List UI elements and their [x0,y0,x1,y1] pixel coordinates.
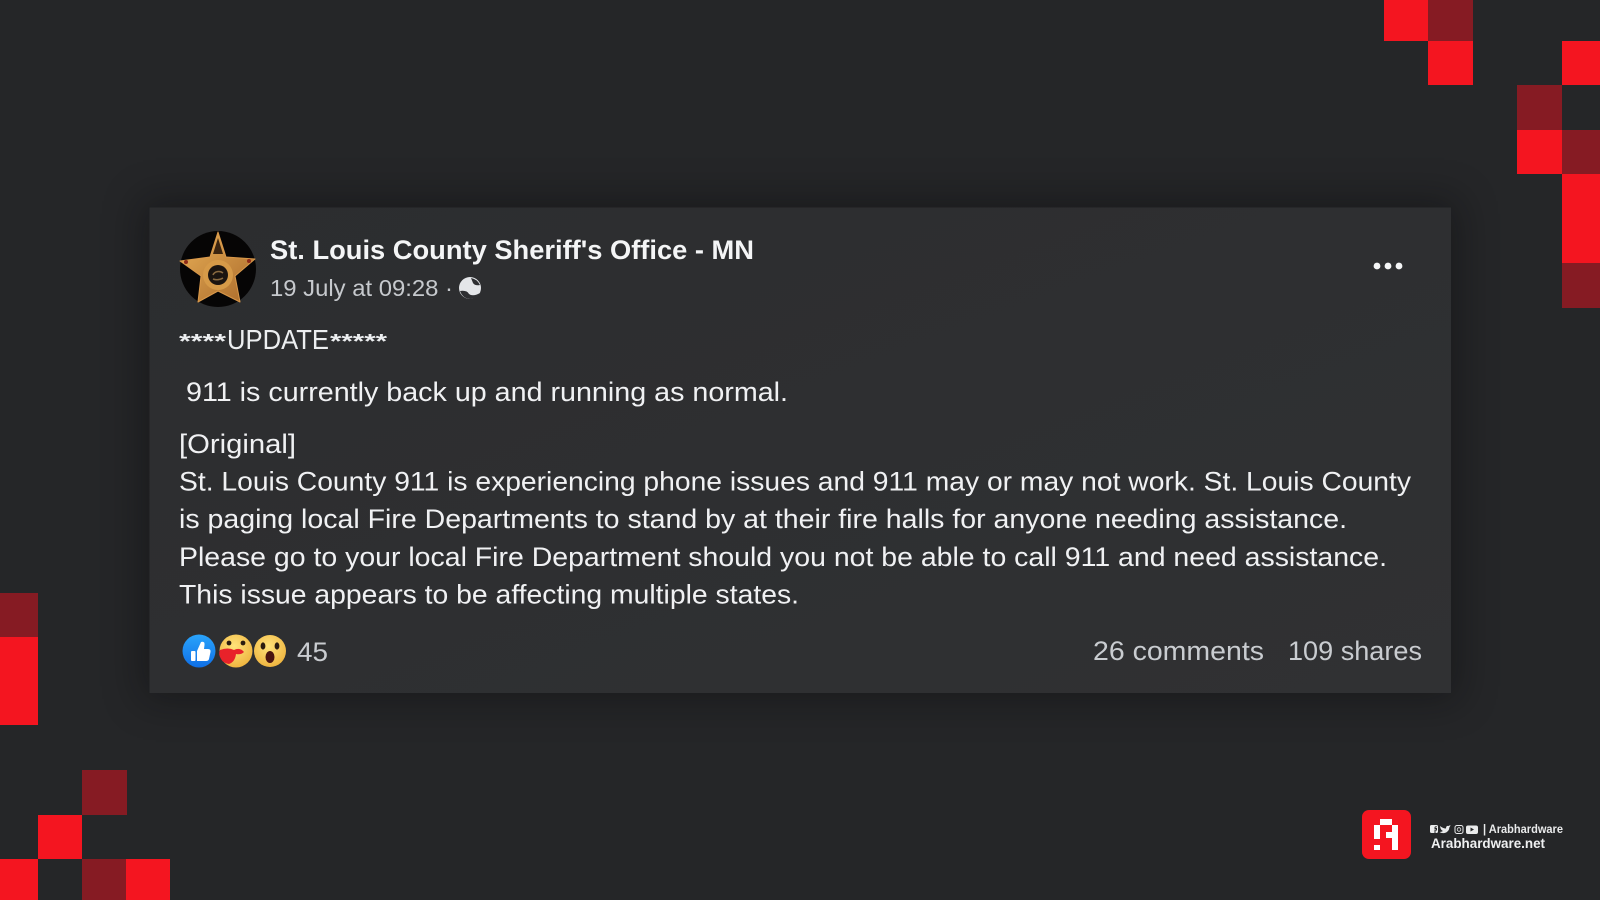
panel: post card shadow [149,207,1451,693]
text: reaction count: 45 [297,637,328,667]
text: website: Arabhardware.net [1431,835,1545,851]
panel: Facebook post [149,207,1451,693]
text: original post: [Original] [179,429,296,459]
text: post date: 19 July at 09:28 · [270,275,453,301]
text: original post: St. Louis County 911 is experiencing phone issues and 911 may or may not work. St. Louis County [179,466,1412,496]
icon: like reaction [182,634,216,668]
text: update heading: UPDATE [227,324,329,355]
text: update heading: **** [179,331,226,353]
text: update heading [179,324,387,355]
icons: social media [1430,825,1478,834]
icon: care reaction [219,634,252,668]
icon: more options [1374,263,1402,269]
logo: Arabhardware [1362,810,1411,859]
decorative pixels: bottom left [0,593,170,900]
text: original post: is paging local Fire Departments to stand by at their fire halls for anyone needing assistance. [179,504,1347,534]
text: original post: Please go to your local Fire Department should you not be able to call 911 and need assistance. [179,542,1387,572]
heading: page name: St. Louis County Sheriff's Office - MN [270,235,754,265]
icon: globe [459,277,481,299]
text: original post: This issue appears to be affecting multiple states. [179,580,799,610]
text: shares count: 109 shares [1288,636,1422,666]
text: update heading: ***** [330,331,387,353]
text: update message: 911 is currently back up and running as normal. [186,377,788,407]
icon: wow reaction [254,635,286,667]
text: original post [179,429,1412,610]
text: comments count: 26 comments [1093,636,1264,666]
text: social handle: | Arabhardware [1483,822,1563,836]
icon: sheriff star avatar [180,231,256,307]
decorative pixels: top right [1384,0,1600,308]
